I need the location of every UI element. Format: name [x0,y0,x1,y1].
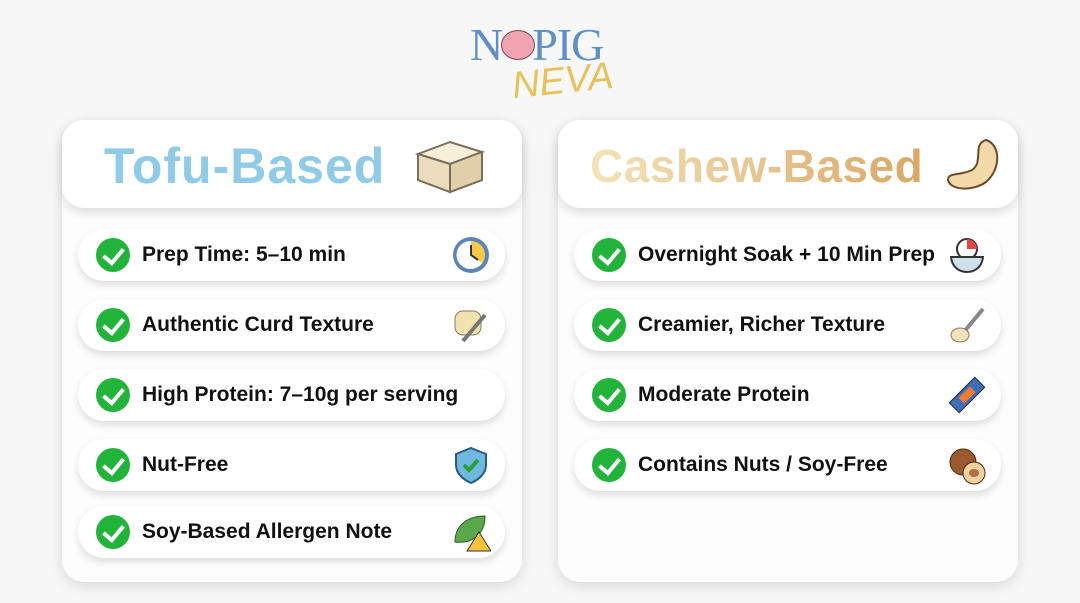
panel: tofu [62,120,522,582]
row: moderate protein [574,369,1001,421]
heading: cashew [558,120,1018,208]
row: protein [78,369,505,421]
icon: tofu cube [415,141,485,194]
icon: cashew [947,139,998,190]
row: texture [78,299,505,351]
row: protein: High Protein: 7–10g per serving [142,383,458,406]
icon: shield [455,446,487,484]
row: soak [574,229,1001,281]
row: allergen [78,506,505,558]
icon: leaf warning [454,516,491,552]
row: nut-free: Nut-Free [142,453,228,476]
row: moderate protein: Moderate Protein [638,383,810,406]
logo: NEVA [510,55,615,107]
heading: tofu [62,120,522,208]
row: creamier: Creamier, Richer Texture [638,313,885,336]
row: contains nuts [574,439,1001,491]
icon: hazelnut [950,448,986,484]
icon: protein bar [948,376,986,414]
icon: timer bowl [950,238,984,273]
icon: spoon [950,308,984,342]
heading: tofu: Tofu-Based [104,138,385,194]
icon: clock [453,237,489,273]
icon: scramble fork [454,310,486,342]
row: soak: Overnight Soak + 10 Min Prep [638,243,935,266]
row: nut-free [78,439,505,491]
row: creamier [574,299,1001,351]
panel: cashew [558,120,1018,582]
row: allergen: Soy-Based Allergen Note [142,520,392,543]
logo [470,19,615,107]
row: contains nuts: Contains Nuts / Soy-Free [638,453,888,476]
row: prep time: Prep Time: 5–10 min [142,243,346,266]
logo: N PIG [470,19,603,70]
heading: cashew: Cashew-Based [590,140,923,192]
row: texture: Authentic Curd Texture [142,313,374,336]
row: prep time [78,229,505,281]
